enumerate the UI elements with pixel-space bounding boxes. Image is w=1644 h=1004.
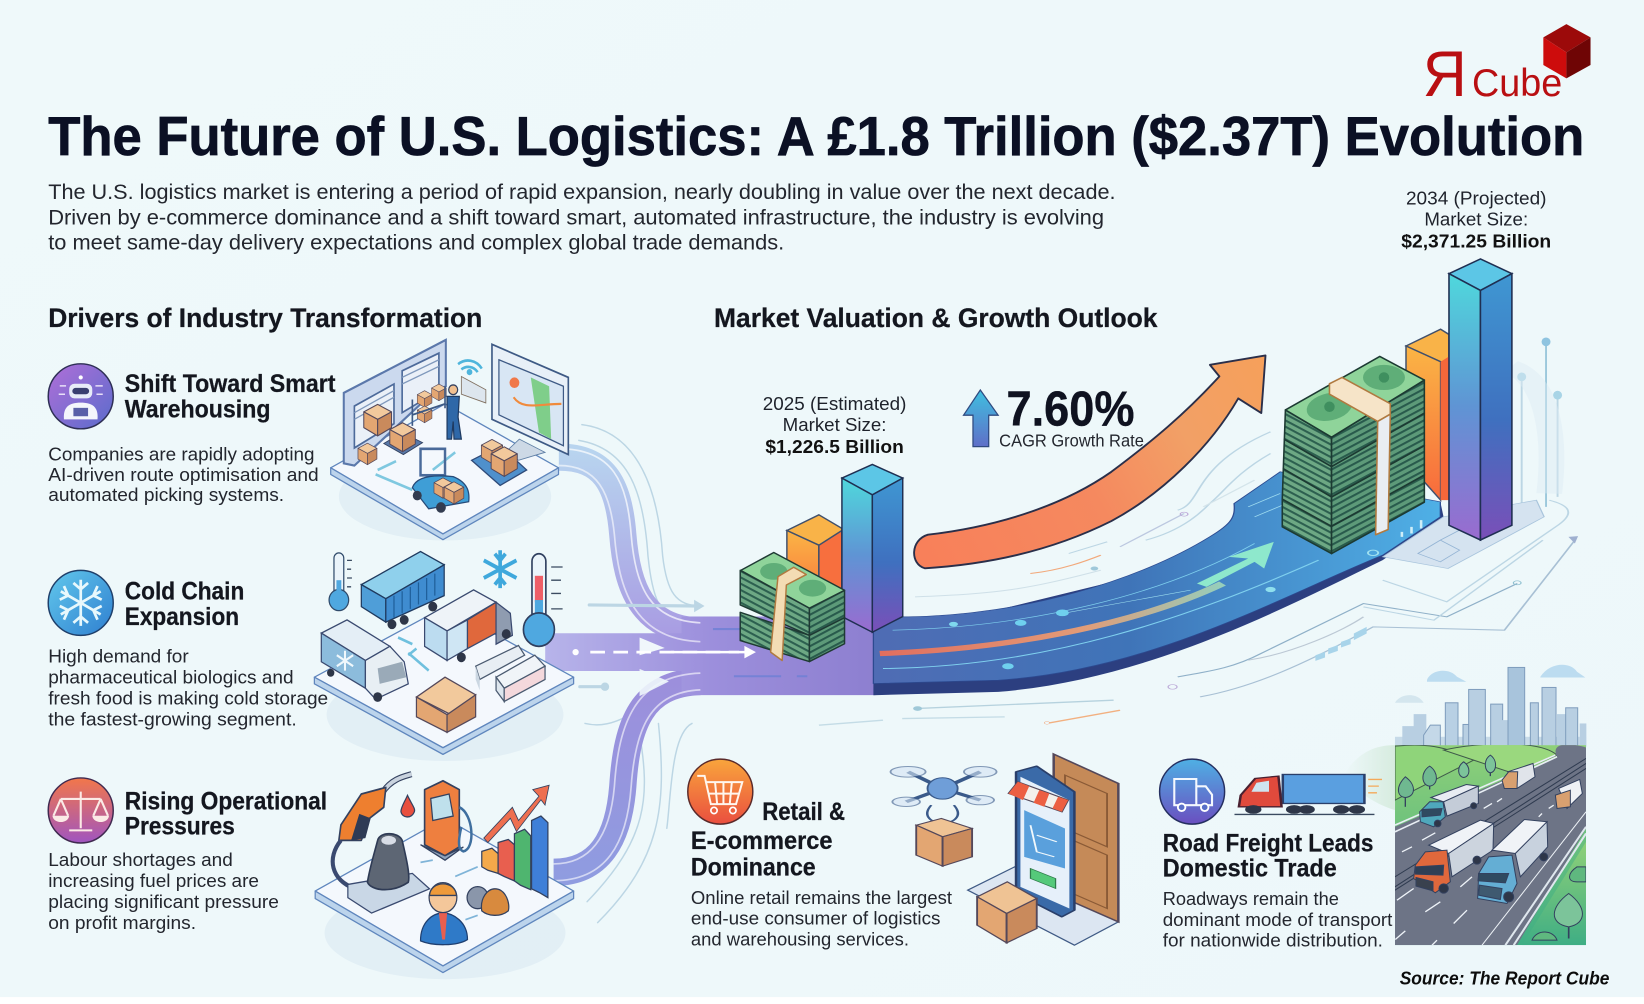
- illustration: operational pressures: [315, 774, 574, 979]
- CAGR value: 7.60%: [1007, 382, 1134, 437]
- intro paragraph: Driven by e-commerce dominance and a shift toward smart, automated infrastructure, the industry is evolving: [48, 205, 1104, 229]
- description: on profit margins.: [48, 912, 196, 933]
- driver: operational pressures: [48, 778, 327, 933]
- road platform: [873, 472, 1444, 695]
- description: the fastest-growing segment.: [48, 709, 297, 730]
- heading: Retail &: [762, 799, 845, 826]
- description: fresh food is making cold storage: [48, 688, 328, 709]
- heading: Rising Operational: [125, 788, 327, 815]
- illustration: warehouse: [331, 340, 568, 541]
- 2025 label: $1,226.5 Billion: [765, 436, 904, 457]
- 2034 label: 2034 (Projected): [1406, 187, 1546, 208]
- description: [691, 887, 953, 950]
- heading: Warehousing: [125, 396, 271, 423]
- heading: Domestic Trade: [1163, 856, 1337, 883]
- road side edge: [873, 502, 1444, 695]
- description: placing significant pressure: [48, 891, 279, 912]
- description: for nationwide distribution.: [1163, 930, 1383, 951]
- description: Labour shortages and: [48, 849, 233, 870]
- bar: orange 2025: [787, 515, 842, 613]
- road lines: [880, 493, 1421, 669]
- heading: [125, 371, 336, 423]
- money stack 2034: [1282, 356, 1424, 554]
- heading: E-commerce: [691, 828, 832, 855]
- description: increasing fuel prices are: [48, 870, 259, 891]
- description: automated picking systems.: [48, 484, 284, 505]
- heading: [691, 799, 845, 881]
- bar: blue 2025: [842, 464, 903, 632]
- heading: Expansion: [125, 604, 239, 631]
- heading: Pressures: [125, 814, 235, 841]
- 2034 label: [1401, 187, 1551, 251]
- icon: snowflake: [48, 570, 113, 635]
- description: pharmaceutical biologics and: [48, 667, 294, 688]
- description: end-use consumer of logistics: [691, 908, 940, 929]
- heading: Cold Chain: [125, 579, 244, 606]
- source note: Source: The Report Cube: [1400, 967, 1609, 988]
- logo wordmark: Cube: [1472, 62, 1562, 105]
- heading: [125, 788, 327, 841]
- heading: Shift Toward Smart: [125, 371, 336, 398]
- driver: cold chain: [48, 570, 328, 730]
- bar: blue 2034: [1449, 259, 1512, 540]
- 2034 label: $2,371.25 Billion: [1401, 230, 1551, 251]
- icon: cart: [688, 759, 753, 824]
- heading: market valuation: Market Valuation & Growth Outlook: [714, 302, 1158, 333]
- description: Companies are rapidly adopting: [48, 443, 315, 464]
- 2025 label: 2025 (Estimated): [763, 393, 906, 414]
- logo: [1423, 24, 1591, 110]
- description: and warehousing services.: [691, 929, 909, 950]
- CAGR label: CAGR Growth Rate: [999, 431, 1144, 451]
- heading: Road Freight Leads: [1163, 830, 1373, 857]
- intro paragraph: to meet same-day delivery expectations and complex global trade demands.: [48, 231, 784, 255]
- driver: road freight: [1160, 759, 1393, 951]
- 2025 label: [763, 393, 906, 457]
- icon: up arrow: [964, 390, 998, 447]
- intro paragraph: The U.S. logistics market is entering a period of rapid expansion, nearly doubling in value over the next decade.: [48, 180, 1116, 204]
- logo cube: [1543, 24, 1591, 78]
- 2034 market graphic: [1282, 259, 1512, 554]
- description: [48, 646, 328, 730]
- description: Roadways remain the: [1163, 888, 1339, 909]
- 2034 label: Market Size:: [1424, 208, 1528, 229]
- heading: [1163, 830, 1373, 883]
- icon: delivery van: [1160, 759, 1225, 824]
- 2025 label: Market Size:: [783, 414, 886, 435]
- 2025 market graphic: [740, 464, 903, 662]
- heading: drivers: Drivers of Industry Transformation: [48, 302, 482, 333]
- bar: orange 2034: [1406, 329, 1449, 500]
- heading: Dominance: [691, 854, 816, 881]
- icon: scales: [48, 778, 113, 843]
- illustration: highway and skyline: [1344, 665, 1586, 945]
- description: [48, 849, 279, 933]
- illustration: drone and phone: [890, 754, 1118, 945]
- circuit decorations: [819, 337, 1578, 725]
- intro paragraph: [48, 180, 1116, 255]
- driver: retail and e-commerce: [688, 759, 953, 950]
- description: [48, 443, 319, 505]
- icon: semi truck: [1234, 774, 1382, 814]
- title: The Future of U.S. Logistics: A £1.8 Trillion ($2.37T) Evolution: [48, 106, 1584, 167]
- illustration: cold chain: [314, 550, 574, 761]
- description: High demand for: [48, 646, 189, 667]
- heading: [125, 579, 244, 631]
- money stack 2025: [740, 553, 845, 662]
- description: AI-driven route optimisation and: [48, 464, 319, 485]
- logo wordmark: Я: [1423, 37, 1467, 110]
- road surface: [873, 472, 1440, 684]
- description: [1163, 888, 1393, 951]
- icon: robot: [48, 364, 113, 429]
- description: Online retail remains the largest: [691, 887, 953, 908]
- CAGR callout: [964, 382, 1144, 451]
- growth arrow: [914, 355, 1266, 568]
- logo wordmark: [1423, 37, 1562, 110]
- flow bands: [545, 425, 875, 923]
- driver: smart warehousing: [48, 364, 336, 505]
- description: dominant mode of transport: [1163, 909, 1393, 930]
